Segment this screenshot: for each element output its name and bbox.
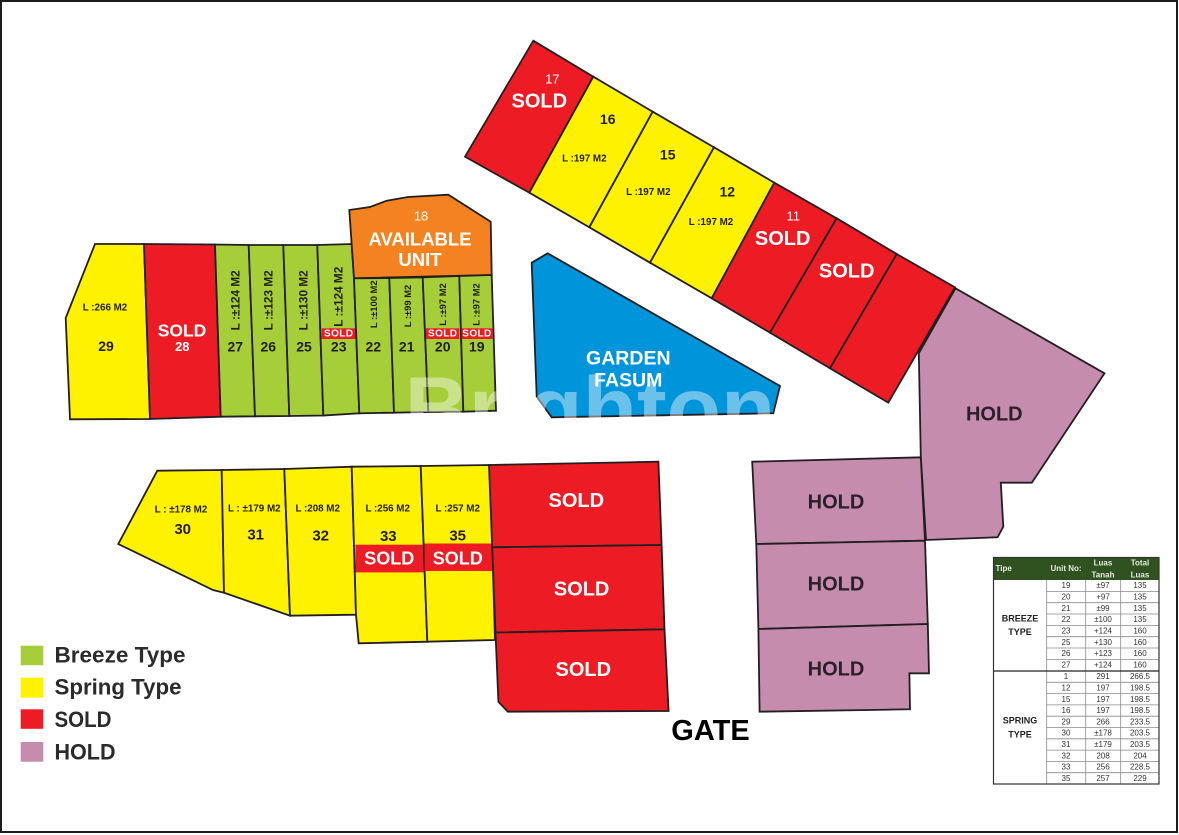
breeze type label — [1002, 614, 1038, 637]
table header: Luas — [1094, 558, 1113, 568]
sold lot: SOLD — [819, 261, 874, 283]
breeze rows: ±99 — [1096, 604, 1110, 613]
lot 32 spring: 32 — [312, 528, 329, 544]
lot 25 breeze: L :±130 M2 — [296, 270, 310, 330]
lot 26 breeze: 26 — [261, 339, 276, 355]
lot 19 breeze: L :±97 M2 — [470, 283, 482, 326]
sold lot middle: SOLD — [554, 578, 609, 600]
lot 26 breeze — [249, 245, 289, 416]
hold lot corner — [919, 288, 1104, 540]
legend: breeze type: Breeze Type — [54, 642, 186, 668]
lot 30 spring — [118, 470, 224, 593]
spring rows: 233.5 — [1130, 717, 1151, 726]
lot 29 spring: L :266 M2 — [83, 302, 128, 314]
spring rows: ±178 — [1094, 729, 1112, 738]
breeze rows: 160 — [1133, 649, 1147, 658]
lot 18 available: 18 — [414, 208, 428, 224]
lot 15 spring — [589, 112, 714, 263]
spring rows: 229 — [1133, 774, 1147, 783]
spring rows: 33 — [1062, 762, 1071, 772]
lot 16 spring: L :197 M2 — [562, 154, 607, 164]
lot 12 spring: L :197 M2 — [689, 217, 734, 228]
sold lot middle — [492, 545, 664, 632]
spring type label — [1003, 716, 1037, 740]
lot 35 spring: 35 — [449, 528, 466, 544]
lot 27 breeze: L :±124 M2 — [228, 270, 242, 330]
sold lot bottom: SOLD — [556, 659, 611, 681]
sold lot top — [489, 462, 662, 547]
breeze rows: +123 — [1094, 649, 1113, 658]
lot 28 sold: SOLD — [158, 321, 206, 341]
table header: Tipe — [996, 564, 1012, 573]
lot 22 breeze: L :±100 M2 — [368, 280, 379, 328]
lot 23 breeze: 23 — [331, 339, 347, 355]
panel: diagonal row of lots — [465, 41, 955, 403]
breeze rows: 23 — [1062, 626, 1071, 636]
panel: garden fasum: GARDEN — [586, 347, 671, 369]
watermark: Brighton — [405, 358, 775, 458]
lot 32 spring — [284, 467, 356, 616]
spring rows: 1 — [1064, 672, 1069, 681]
breeze rows: 27 — [1062, 660, 1071, 670]
breeze rows: +124 — [1094, 626, 1113, 636]
hold lot middle — [756, 541, 928, 629]
hold lot middle: HOLD — [808, 574, 864, 596]
lot 20 breeze — [423, 276, 463, 412]
lot 20 breeze: SOLD — [428, 328, 457, 339]
panel: bottom block of lots — [118, 465, 495, 643]
breeze rows: 160 — [1133, 660, 1147, 670]
table header — [994, 558, 1159, 580]
table header: Unit No: — [1050, 564, 1082, 573]
hold lot upper: HOLD — [808, 491, 864, 513]
sold lot top: SOLD — [549, 490, 604, 512]
spring rows: 266.5 — [1130, 672, 1151, 681]
sold lot — [770, 218, 897, 368]
breeze rows: +130 — [1094, 638, 1113, 647]
lot 19 breeze: 19 — [469, 339, 485, 355]
spring rows: 31 — [1062, 740, 1071, 749]
breeze rows: 21 — [1062, 604, 1071, 613]
lot 35 spring: SOLD — [433, 548, 483, 568]
lot 29 spring — [66, 244, 150, 419]
lot 20 breeze: 20 — [435, 339, 451, 355]
breeze rows: 135 — [1133, 581, 1147, 590]
spring rows: 29 — [1062, 717, 1071, 726]
lot 18 available: AVAILABLE — [368, 228, 472, 250]
lot 20 breeze: L :±97 M2 — [437, 283, 448, 326]
lot 30 spring: L : ±178 M2 — [155, 504, 208, 516]
breeze type label: TYPE — [1008, 627, 1032, 637]
lot 27 breeze: 27 — [228, 339, 243, 355]
lot 35 spring — [421, 465, 495, 642]
lot 25 breeze: 25 — [296, 339, 312, 355]
lot 33 spring: L :256 M2 — [365, 504, 410, 514]
sold lot bottom — [496, 629, 669, 712]
spring rows: 257 — [1096, 774, 1110, 783]
spring rows: 35 — [1062, 774, 1071, 783]
legend: spring type: Spring Type — [54, 674, 182, 700]
lot 23 breeze: SOLD — [324, 328, 353, 339]
lot 19 breeze — [459, 275, 496, 412]
panel: garden fasum — [532, 253, 780, 417]
spring rows: 198.5 — [1130, 684, 1151, 692]
lot 17 sold — [465, 41, 593, 193]
sold lot unlabelled — [830, 254, 955, 403]
lot 29 spring: 29 — [98, 338, 114, 354]
lot 23 breeze: L :±124 M2 — [332, 266, 346, 327]
lot 12 spring — [650, 147, 774, 298]
lot 28 sold — [144, 244, 221, 419]
legend: sold — [21, 707, 112, 732]
panel: hold block — [752, 288, 1104, 712]
breeze rows: 135 — [1133, 592, 1147, 602]
breeze rows: ±100 — [1094, 615, 1112, 624]
lot 21 breeze — [389, 277, 428, 413]
spring rows: 16 — [1062, 706, 1071, 715]
lot 32 spring: L :208 M2 — [295, 504, 340, 514]
breeze rows: 160 — [1133, 626, 1147, 636]
lot 15 spring: L :197 M2 — [626, 187, 671, 198]
lot 11 sold: 11 — [787, 208, 800, 224]
panel: left block of lots — [66, 195, 496, 419]
spring rows: 197 — [1096, 706, 1110, 715]
spring rows: 228.5 — [1130, 762, 1151, 772]
gate label: GATE — [671, 715, 750, 747]
spring rows: 32 — [1062, 751, 1071, 760]
lot 33 spring — [352, 466, 427, 643]
spring rows: 12 — [1062, 684, 1071, 692]
panel: garden fasum: FASUM — [594, 370, 662, 392]
spring rows — [1062, 672, 1151, 783]
lot 17 sold: 17 — [545, 72, 560, 86]
hold lot corner: HOLD — [966, 403, 1023, 425]
lot 16 spring: 16 — [600, 111, 616, 127]
spring rows: 291 — [1096, 672, 1110, 681]
lot 21 breeze: L :±99 M2 — [402, 285, 413, 327]
legend — [21, 642, 186, 764]
hold lot lower — [758, 624, 929, 712]
spring rows: 204 — [1133, 751, 1147, 760]
lot 31 spring: 31 — [247, 526, 264, 544]
hold lot upper — [752, 457, 925, 544]
spring rows: 203.5 — [1130, 740, 1151, 749]
lot 25 breeze — [283, 245, 323, 416]
lot 21 breeze: 21 — [399, 339, 415, 355]
lot 28 sold: 28 — [175, 339, 190, 354]
table header: Tanah — [1092, 570, 1115, 580]
spring rows: 208 — [1096, 751, 1110, 760]
lot 11 sold — [712, 183, 837, 333]
lot 18 available — [349, 195, 492, 278]
spring rows: ±179 — [1094, 740, 1112, 749]
lot 23 breeze — [317, 244, 359, 416]
lot 19 breeze: SOLD — [462, 328, 492, 339]
spring rows: 256 — [1096, 762, 1110, 772]
breeze rows: 135 — [1133, 604, 1147, 613]
legend: sold: SOLD — [54, 707, 112, 732]
table header: Luas — [1131, 570, 1150, 580]
lot 22 breeze — [354, 278, 394, 413]
spring type label: SPRING — [1003, 716, 1037, 726]
hold lot lower: HOLD — [808, 658, 864, 680]
lot 12 spring: 12 — [720, 184, 735, 200]
lot 11 sold: SOLD — [755, 228, 810, 250]
breeze rows: +124 — [1094, 660, 1113, 670]
spring type label: TYPE — [1008, 730, 1032, 740]
lot 17 sold: SOLD — [512, 91, 567, 113]
breeze type label: BREEZE — [1002, 614, 1038, 624]
lot 22 breeze: 22 — [366, 339, 381, 355]
lot 27 breeze — [215, 244, 255, 417]
breeze rows: 20 — [1062, 592, 1071, 602]
lot 16 spring — [529, 77, 653, 227]
lot 35 spring: L :257 M2 — [435, 504, 480, 514]
table header: Total — [1131, 558, 1149, 568]
breeze rows: +97 — [1096, 592, 1110, 602]
spring rows: 197 — [1096, 695, 1110, 704]
breeze rows: 19 — [1062, 581, 1071, 590]
lot 33 spring: 33 — [380, 528, 397, 545]
breeze rows: ±97 — [1096, 581, 1110, 590]
breeze rows: 135 — [1133, 615, 1147, 624]
panel: sold block — [489, 462, 669, 712]
lot 31 spring: L : ±179 M2 — [228, 504, 281, 514]
lot 18 available: UNIT — [398, 249, 442, 270]
spring rows: 15 — [1062, 695, 1071, 704]
lot 15 spring: 15 — [660, 146, 676, 162]
legend: hold — [21, 740, 116, 764]
spring rows: 198.5 — [1130, 706, 1151, 715]
spring rows: 197 — [1096, 684, 1110, 692]
lot 30 spring: 30 — [174, 521, 191, 538]
breeze rows: 26 — [1062, 649, 1071, 658]
breeze rows — [1062, 581, 1147, 670]
breeze rows: 22 — [1062, 615, 1071, 624]
breeze rows: 25 — [1062, 638, 1071, 647]
spring rows: 203.5 — [1130, 729, 1151, 738]
spring rows: 266 — [1096, 717, 1110, 726]
table: unit areas — [994, 558, 1159, 784]
spring rows: 198.5 — [1130, 695, 1151, 704]
lot 33 spring: SOLD — [364, 548, 414, 568]
spring rows: 30 — [1062, 729, 1071, 738]
breeze rows: 160 — [1133, 638, 1147, 647]
lot 26 breeze: L :±123 M2 — [261, 270, 275, 330]
legend: hold: HOLD — [54, 740, 116, 764]
lot 31 spring — [222, 469, 290, 616]
